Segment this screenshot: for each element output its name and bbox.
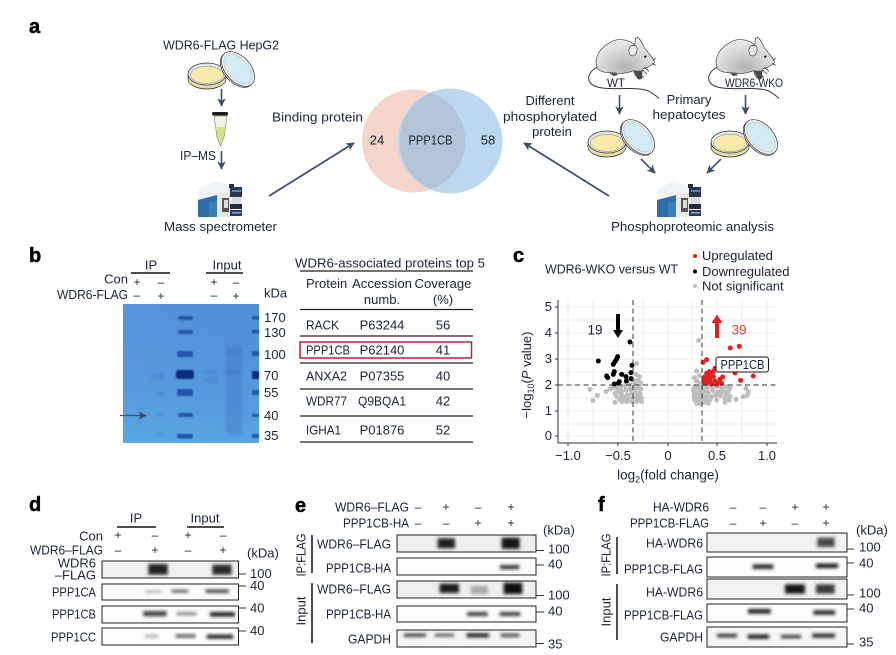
icon: mass spectrometer 2 [657, 181, 701, 217]
volcano plot [519, 299, 777, 484]
volcano plot: log [617, 468, 635, 482]
table: WDR6-associated proteins [295, 256, 485, 442]
icon: WT petri dish [588, 113, 661, 162]
volcano plot: −0.5 [605, 448, 631, 463]
blot labels e: PPP1CB-HA [326, 606, 391, 622]
gel size markers [264, 310, 286, 443]
volcano plot: (fold change) [640, 468, 719, 482]
blots f [707, 533, 847, 647]
table: WDR6-associated proteins: RACK [306, 318, 339, 332]
lane labels: (kDa) [247, 546, 279, 560]
lane labels e: – [415, 516, 422, 530]
lane labels: + [151, 543, 159, 557]
gel size markers: 170 [264, 310, 286, 325]
lane labels e: + [507, 516, 515, 530]
blot labels f: HA-WDR6 [646, 536, 703, 550]
gel labels: Input [213, 258, 242, 272]
icon: WT mouse [589, 37, 659, 99]
panel letter b: b [29, 245, 41, 267]
gel labels: Con [104, 272, 128, 286]
size markers d: 40 [250, 623, 264, 638]
side labels e [294, 534, 312, 643]
gel labels: – [233, 275, 240, 289]
panel: a [29, 16, 784, 234]
side labels f: IP:FLAG [598, 534, 614, 576]
blot labels d: PPP1CC [51, 630, 96, 644]
lane labels f: + [791, 500, 799, 514]
lane labels e: (kDa) [543, 522, 575, 538]
gel labels: – [211, 288, 218, 302]
venn diagram: 58 [481, 132, 495, 148]
volcano plot: 0.5 [708, 448, 726, 463]
table: WDR6-associated proteins: Coverage [414, 276, 472, 291]
side labels f: Input [598, 597, 614, 626]
table: WDR6-associated proteins: Accession [352, 276, 412, 291]
volcano plot: −1.0 [555, 448, 581, 463]
lane labels: – [115, 543, 122, 557]
blot labels d [51, 556, 96, 644]
table: WDR6-associated proteins: 40 [436, 368, 450, 384]
lane labels: IP [130, 510, 142, 526]
count: 19 down: 19 [587, 322, 603, 338]
blot labels f: PPP1CB-FLAG [624, 608, 703, 622]
size markers f: 40 [859, 600, 873, 616]
gel labels [57, 258, 288, 303]
lane labels f: – [730, 516, 737, 530]
gel labels: + [157, 289, 165, 303]
arrow: to venn from right [524, 143, 609, 196]
icon: mass spectrometer [198, 181, 242, 217]
gel labels: + [232, 289, 240, 303]
text: phosphoproteomic analysis: Phosphoproteomic analysis [611, 219, 775, 234]
size markers d: 40 [250, 600, 264, 616]
table: WDR6-associated proteins: P63244 [360, 318, 404, 332]
table: WDR6-associated proteins: (%) [433, 292, 453, 307]
panel: f [598, 494, 888, 650]
size markers e: 40 [548, 604, 562, 618]
icon: petri dish [188, 45, 261, 94]
panel letter c: c [513, 245, 524, 267]
blot labels d: WDR6 [58, 556, 96, 570]
volcano plot: −log [519, 394, 534, 419]
size markers e: 40 [548, 556, 562, 572]
text: IP-MS: IP–MS [180, 148, 216, 163]
count: 39 up: 39 [731, 322, 747, 338]
lane labels f [630, 500, 888, 538]
volcano plot: P value) [519, 331, 534, 379]
lane labels e: – [443, 516, 450, 530]
lane labels e: – [475, 500, 482, 514]
panel: e [294, 495, 575, 652]
volcano plot: 1.0 [758, 448, 776, 463]
volcano plot: 5 [545, 299, 552, 314]
lane labels f: + [822, 500, 830, 514]
gel size markers: 70 [264, 368, 278, 383]
text: primary hepatocytes [652, 92, 726, 122]
gel size markers: 35 [264, 428, 278, 443]
gel size markers: 100 [264, 347, 286, 362]
volcano plot: 1 [545, 403, 552, 418]
blot labels f: HA-WDR6 [646, 584, 703, 600]
size markers f: 35 [859, 634, 873, 650]
arrow: gel band [120, 414, 146, 416]
table: WDR6-associated proteins: 41 [436, 342, 450, 358]
table: WDR6-associated proteins: 42 [436, 394, 450, 408]
volcano plot: 2 [635, 474, 640, 484]
legend [693, 248, 789, 294]
lane labels e: + [474, 516, 482, 530]
icon: WKO mouse [709, 37, 779, 99]
panel letter e: e [295, 495, 306, 517]
table highlight [300, 342, 472, 358]
text: different phosphorylated protein: protein [532, 124, 572, 139]
legend: Not significant [702, 278, 784, 294]
panel: d [29, 494, 279, 645]
table: WDR6-associated proteins: WDR77 [306, 394, 347, 408]
text: mass spectrometer: Mass spectrometer [164, 219, 278, 234]
volcano plot: ( [519, 379, 534, 384]
text: different phosphorylated protein: Different [526, 93, 575, 108]
table: WDR6-associated proteins: P62140 [360, 342, 404, 358]
gel labels: WDR6-FLAG [57, 287, 128, 302]
arrow: WT mouse to dish [618, 95, 620, 114]
text: primary hepatocytes: Primary [667, 92, 712, 107]
arrow: to venn [269, 143, 354, 196]
arrow: WKO mouse to dish [744, 95, 746, 114]
blot labels e: WDR6–FLAG [317, 536, 391, 552]
arrow: up [712, 314, 722, 338]
lane labels f: + [759, 516, 767, 530]
gel labels: + [210, 275, 218, 289]
volcano plot: 2 [545, 377, 552, 392]
size markers f [847, 540, 881, 650]
size markers e: 100 [548, 588, 570, 602]
text: different phosphorylated protein: phosphorylated [503, 109, 597, 124]
blots e [397, 535, 536, 647]
icon: tube [212, 112, 228, 146]
lane labels: – [185, 543, 192, 557]
blot labels f [624, 536, 703, 644]
arrow: dish to tube [220, 89, 222, 106]
volcano plot: 4 [545, 325, 552, 340]
table: WDR6-associated proteins: ANXA2 [306, 368, 347, 384]
gel labels: + [133, 275, 141, 289]
volcano plot: 0 [664, 448, 672, 463]
label: WT: WT [607, 78, 625, 90]
side labels e: Input [294, 596, 308, 625]
panel letter f: f [598, 494, 605, 516]
arrow: tube to mass spectrometer [220, 151, 222, 169]
arrow: down [613, 314, 623, 338]
blot labels e [317, 536, 391, 646]
blot labels e: PPP1CB-HA [326, 560, 391, 576]
table: WDR6-associated proteins: P07355 [360, 368, 404, 384]
icon: WKO petri dish [711, 113, 784, 162]
lane labels e: WDR6–FLAG [335, 500, 409, 514]
venn diagram [272, 88, 502, 194]
lane labels f: PPP1CB-FLAG [630, 516, 709, 530]
blot labels f: GAPDH [660, 630, 703, 644]
gel labels: – [158, 275, 165, 289]
legend: Downregulated [702, 264, 789, 279]
venn diagram: Binding protein [272, 110, 363, 124]
venn diagram: PPP1CB [408, 132, 452, 148]
lane labels: WDR6–FLAG [30, 542, 103, 558]
volcano plot: 0 [545, 428, 552, 443]
lane labels e: – [415, 500, 422, 514]
lane labels: Input [191, 510, 220, 526]
gel labels: IP [145, 258, 157, 272]
callout: PPP1CB: PPP1CB [720, 357, 764, 372]
lane labels: + [184, 528, 192, 542]
blot labels e: WDR6–FLAG [317, 582, 391, 596]
gel labels: kDa [264, 286, 288, 300]
text: different phosphorylated protein [503, 93, 597, 139]
text: cell line: WDR6-FLAG HepG2 [163, 38, 279, 52]
lane labels f: (kDa) [856, 522, 888, 538]
table: WDR6-associated proteins: 52 [436, 422, 450, 438]
panel: c [513, 245, 789, 484]
arrow: WKO dish to analysis [707, 159, 721, 173]
blot labels d: PPP1CB [52, 606, 96, 622]
lane labels: – [220, 528, 227, 542]
size markers e [536, 542, 570, 652]
gel labels: – [134, 288, 141, 302]
gel size markers: 130 [264, 325, 286, 340]
table: WDR6-associated proteins: Q9BQA1 [358, 394, 406, 408]
lane labels: + [219, 543, 227, 557]
side labels e: IP:FLAG [294, 534, 308, 576]
size markers e: 100 [548, 542, 570, 556]
size markers d: 40 [250, 578, 264, 593]
side labels f [598, 534, 617, 640]
gel size markers: 55 [264, 385, 278, 400]
panel: b [29, 245, 485, 443]
blot labels d: –FLAG [55, 568, 96, 582]
lane labels f: – [792, 516, 799, 530]
lane labels f: – [730, 500, 737, 514]
lane labels e [335, 500, 575, 538]
blot labels e: GAPDH [348, 632, 391, 646]
lane labels e: + [507, 500, 515, 514]
blot labels d: PPP1CA [52, 584, 96, 600]
lane labels e: PPP1CB-HA [343, 516, 409, 530]
lane labels [30, 510, 279, 560]
panel letter a: a [29, 16, 41, 38]
label: WDR6-WKO: WDR6-WKO [725, 78, 783, 90]
volcano plot: 3 [545, 351, 552, 366]
table: WDR6-associated proteins: 56 [436, 318, 450, 332]
blot labels f: PPP1CB-FLAG [624, 562, 703, 576]
gel size markers: 40 [264, 408, 278, 423]
size markers f: 100 [859, 540, 881, 554]
size markers d [238, 566, 272, 638]
table: WDR6-associated proteins: Protein [306, 276, 347, 291]
table: WDR6-associated proteins: P01876 [360, 422, 404, 438]
table: WDR6-associated proteins: WDR6-associated proteins top 5 [295, 256, 485, 270]
chart title: WDR6-WKO versus WT [545, 262, 678, 276]
table: WDR6-associated proteins: PPP1CB [306, 342, 350, 358]
lane labels e: + [442, 500, 450, 514]
lane labels f: – [760, 500, 767, 514]
text: primary hepatocytes: hepatocytes [652, 107, 726, 122]
lane labels f: + [822, 516, 830, 530]
blots d [102, 561, 238, 645]
lane labels: Con [79, 528, 103, 544]
lane labels f: HA-WDR6 [653, 500, 709, 514]
size markers f: 100 [859, 586, 881, 600]
venn diagram: 24 [370, 132, 384, 148]
arrow: WT dish to analysis [641, 159, 655, 173]
volcano plot: 10 [526, 384, 536, 394]
legend: Upregulated [702, 248, 773, 263]
size markers e: 35 [548, 636, 562, 652]
lane labels: + [114, 528, 122, 542]
lane labels: – [152, 528, 159, 542]
size markers f: 40 [859, 556, 873, 570]
size markers d: 100 [250, 566, 272, 581]
Coomassie gel [123, 304, 259, 443]
panel letter d: d [29, 494, 41, 516]
table: WDR6-associated proteins: IGHA1 [306, 422, 341, 438]
table: WDR6-associated proteins: numb. [364, 292, 400, 307]
